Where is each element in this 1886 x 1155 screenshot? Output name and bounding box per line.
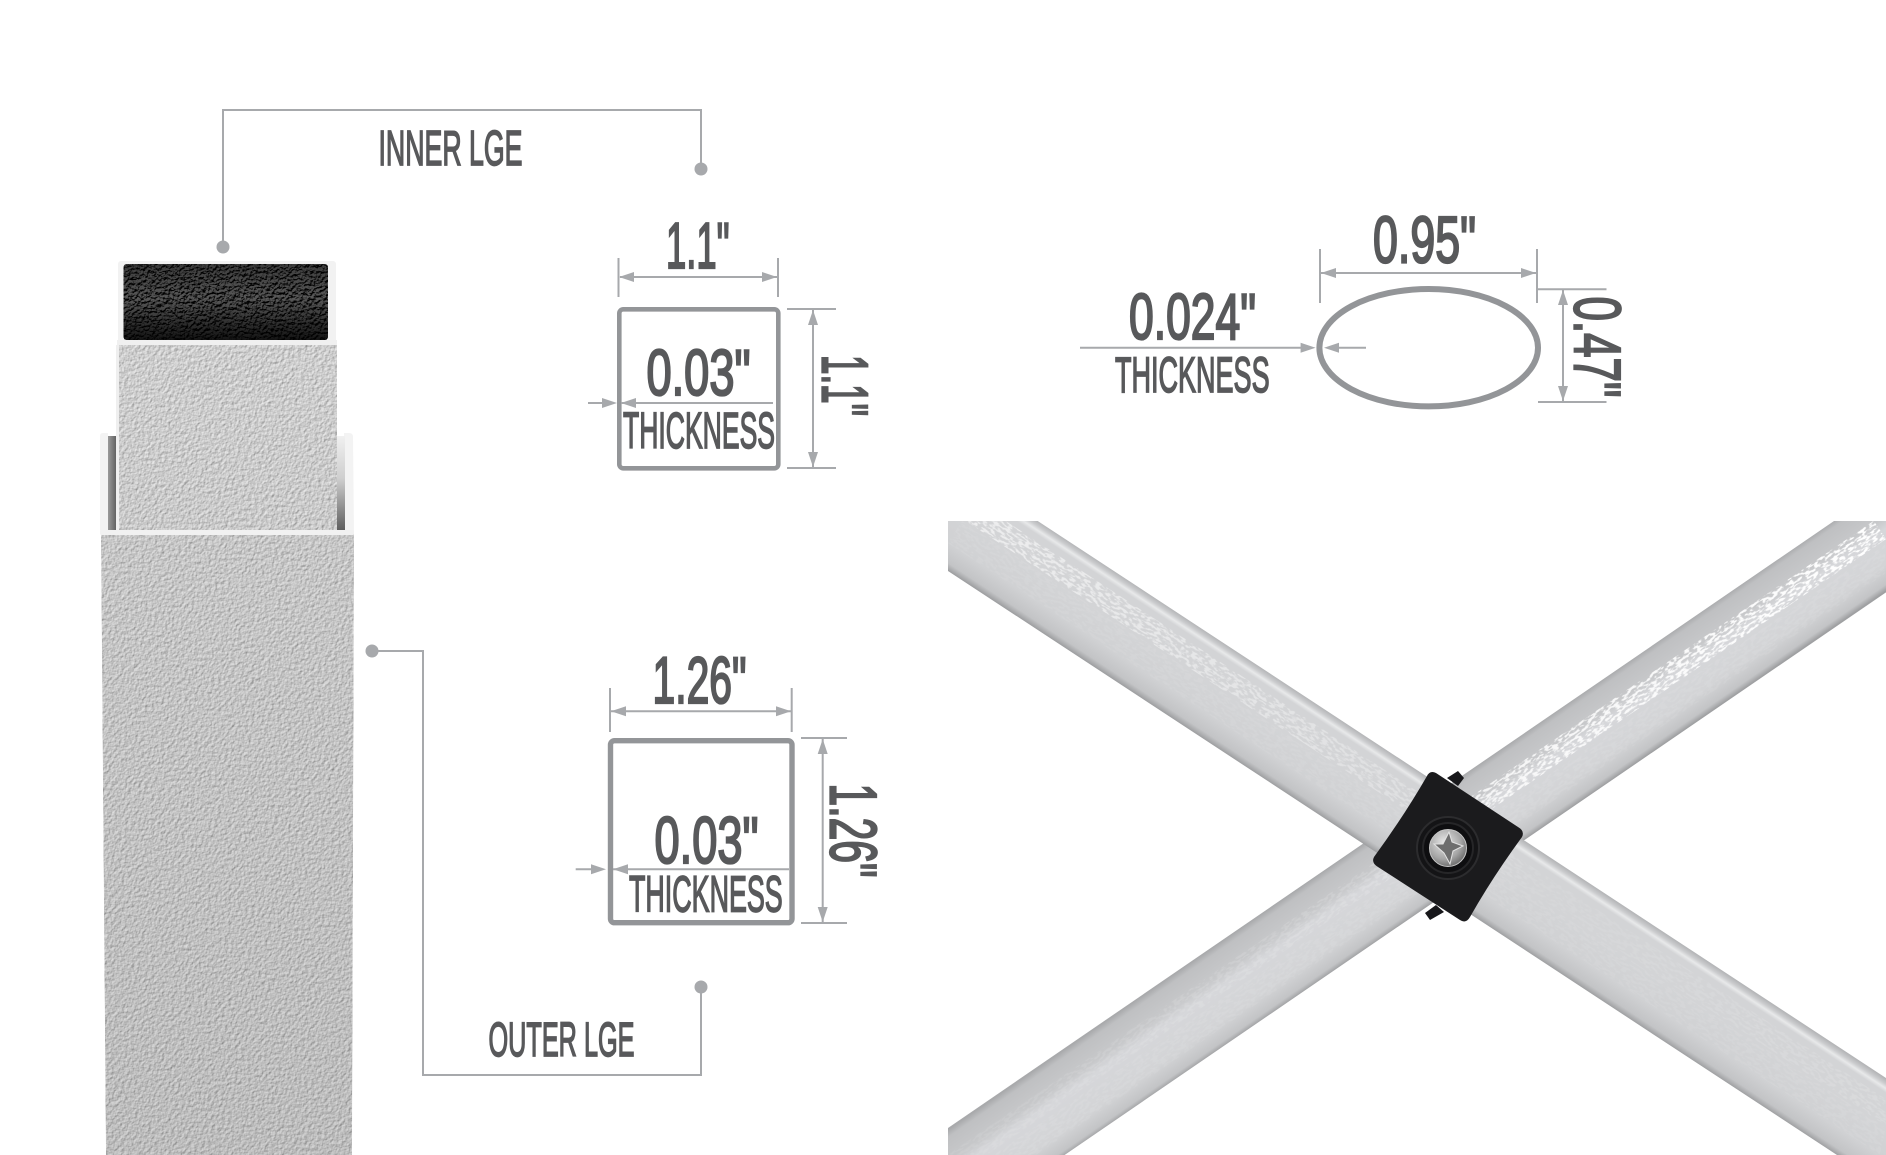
oval width dimension	[1320, 203, 1537, 303]
inner width dimension	[618, 209, 778, 297]
outer tube	[100, 530, 354, 1155]
inner square profile	[619, 309, 778, 468]
outer thickness callout: 0.03"	[654, 803, 758, 877]
outer height dimension: 1.26"	[817, 784, 891, 878]
tube falling to the right	[948, 501, 1886, 1155]
black clamp with screw	[1373, 771, 1523, 921]
diagram: inner tube cross-section	[588, 209, 882, 468]
inner height dimension	[787, 309, 882, 468]
oval height dimension	[1538, 289, 1635, 402]
panel: square tube photo	[100, 261, 354, 1155]
oval thickness callout: 0.024"	[1129, 280, 1256, 353]
tube rising to the right	[948, 521, 1886, 1155]
label: inner LGE: INNER LGE	[378, 121, 522, 176]
outer height dimension	[801, 738, 891, 923]
inner thickness callout: 0.03"	[646, 336, 750, 409]
oval profile	[1319, 289, 1538, 406]
inner tube	[116, 261, 337, 530]
oval width dimension: 0.95"	[1373, 203, 1476, 277]
inner height dimension: 1.1"	[809, 355, 882, 416]
black tube interior	[124, 264, 328, 340]
outer thickness callout: THICKNESS	[629, 866, 783, 923]
inner LGE bracket	[216, 110, 708, 254]
outer LGE bracket	[366, 644, 708, 1075]
diagram: outer tube cross-section	[576, 643, 891, 923]
inner thickness callout: THICKNESS	[623, 402, 775, 459]
oval thickness callout: THICKNESS	[1115, 347, 1270, 403]
oval thickness callout	[1080, 280, 1366, 403]
diagram: oval tube cross-section	[1080, 203, 1635, 406]
outer tube rear lip	[100, 433, 354, 534]
panel: crossed round tubes photo	[948, 501, 1886, 1155]
inner thickness callout	[588, 336, 775, 459]
label: outer LGE: OUTER LGE	[488, 1013, 634, 1067]
outer width dimension	[610, 643, 792, 732]
outer width dimension: 1.26"	[652, 643, 746, 717]
inner width dimension: 1.1"	[666, 209, 730, 282]
oval height dimension: 0.47"	[1561, 296, 1635, 398]
outer square profile	[610, 741, 792, 923]
outer thickness callout	[576, 803, 789, 923]
